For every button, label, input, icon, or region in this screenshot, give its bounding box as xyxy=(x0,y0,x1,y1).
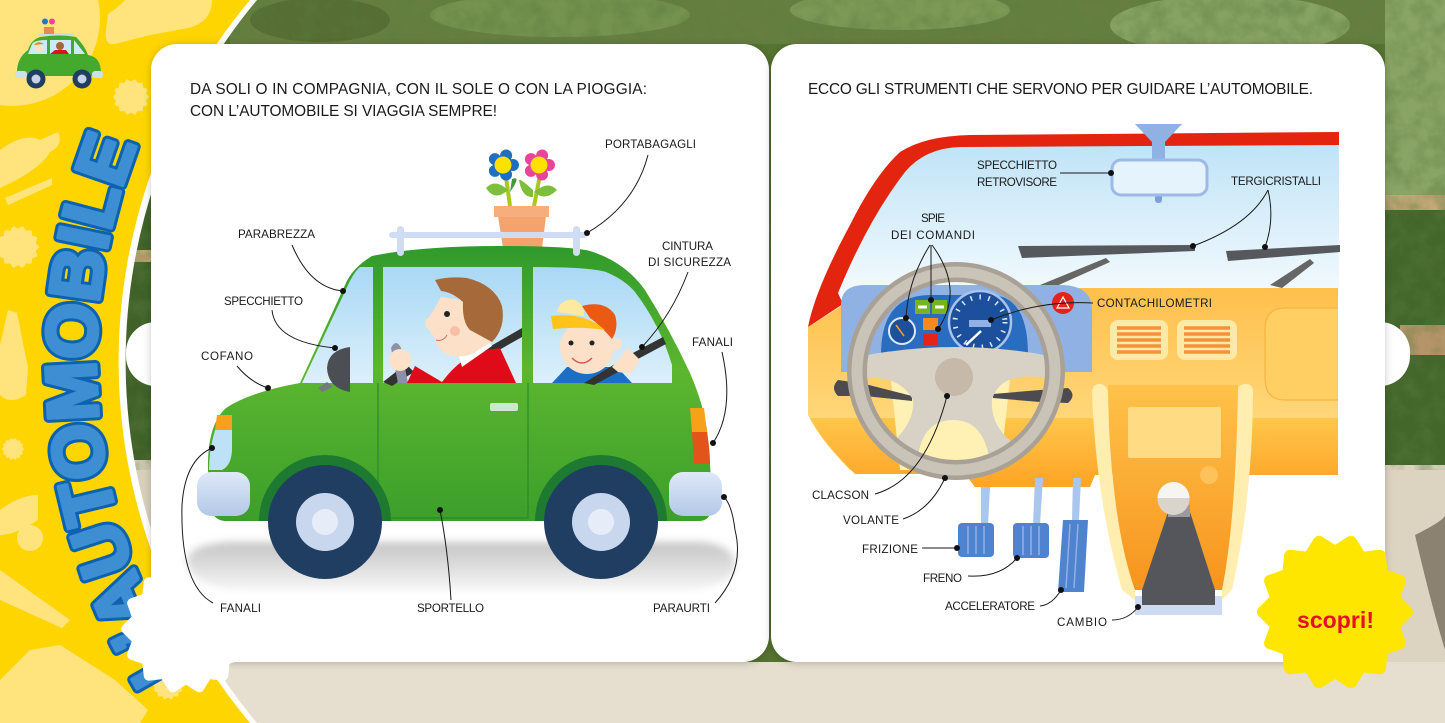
labels: left page: PARABREZZA xyxy=(238,228,315,241)
gear lever xyxy=(1142,482,1215,605)
yellow badge: scopri!: scopri! xyxy=(1297,607,1374,633)
door lines xyxy=(378,383,528,518)
red frame xyxy=(808,132,1339,327)
labels: right page: RETROVISORE xyxy=(977,176,1057,189)
labels: left page: SPECCHIETTO xyxy=(224,295,303,308)
center console xyxy=(1092,384,1253,615)
windshield xyxy=(302,267,373,383)
driver xyxy=(383,277,522,386)
yellow side band xyxy=(0,0,257,723)
glove box xyxy=(1265,308,1338,400)
middle window xyxy=(383,267,522,383)
title: L'AUTOMOBILE: L’AUTOMOBILE xyxy=(41,126,162,694)
heading: left page: CON L’AUTOMOBILE SI VIAGGIA SEMPRE! xyxy=(190,103,497,120)
labels: right page: DEI COMANDI xyxy=(891,229,975,242)
heading: left page: DA SOLI O IN COMPAGNIA, CON IL SOLE O CON LA PIOGGIA: xyxy=(190,81,647,98)
rear view mirror xyxy=(1112,124,1207,203)
warning lights xyxy=(915,300,947,345)
stalks xyxy=(834,380,1072,403)
tab: left xyxy=(126,322,186,386)
door handle xyxy=(490,403,518,411)
rear window xyxy=(533,267,672,383)
labels: left page: FANALI xyxy=(220,602,261,615)
windshield glass xyxy=(835,143,1339,300)
decorative pale silhouettes xyxy=(0,0,212,723)
labels: left page: DI SICUREZZA xyxy=(648,256,731,269)
labels: left page: COFANO xyxy=(201,350,253,363)
labels: left page: PORTABAGAGLI xyxy=(605,138,696,151)
panel: left page xyxy=(126,44,769,687)
car body xyxy=(208,246,711,521)
air vents xyxy=(1110,320,1237,360)
hazard button xyxy=(1052,292,1074,314)
labels: right page: VOLANTE xyxy=(843,514,899,527)
roof rack xyxy=(389,226,587,256)
tab: right xyxy=(1350,322,1410,386)
wipers xyxy=(1018,245,1340,288)
speedometer xyxy=(949,291,1011,353)
fuel gauge xyxy=(889,318,915,344)
labels: right page: FRIZIONE xyxy=(862,543,918,556)
steering column xyxy=(891,380,1010,470)
title: L'AUTOMOBILE: L’AUTOMOBILE xyxy=(44,130,157,691)
ground shadow xyxy=(187,542,735,590)
heading: right page: ECCO GLI STRUMENTI CHE SERVONO PER GUIDARE L’AUTOMOBILE. xyxy=(808,81,1313,98)
white starburst xyxy=(126,571,246,687)
heading: left page xyxy=(190,81,647,120)
labels: right page: CONTACHILOMETRI xyxy=(1097,297,1212,310)
instrument cluster xyxy=(841,285,1092,372)
car illustration xyxy=(187,155,735,590)
callout dots: right page xyxy=(903,170,1268,610)
labels: right page: TERGICRISTALLI xyxy=(1231,175,1321,188)
bumpers xyxy=(197,472,250,516)
labels: right page: ACCELERATORE xyxy=(945,600,1035,613)
pedals xyxy=(958,478,1088,592)
panel: right page xyxy=(771,44,1385,662)
callouts: left page xyxy=(182,155,737,603)
labels: right page: FRENO xyxy=(923,572,962,585)
labels: right page xyxy=(812,159,1321,629)
steering wheel xyxy=(857,272,1055,470)
labels: left page xyxy=(201,138,733,615)
labels: right page: CAMBIO xyxy=(1057,616,1107,629)
dashboard body xyxy=(808,288,1338,475)
front light xyxy=(209,415,232,470)
labels: left page: SPORTELLO xyxy=(417,602,484,615)
yellow badge: scopri! xyxy=(1263,542,1407,682)
callouts: right page xyxy=(875,173,1271,620)
labels: right page: SPECCHIETTO xyxy=(977,159,1057,172)
child xyxy=(551,300,666,385)
labels: right page: CLACSON xyxy=(812,489,869,502)
rear light xyxy=(690,408,710,464)
labels: left page: PARAURTI xyxy=(653,602,710,615)
icon: small car xyxy=(15,18,103,88)
dashboard illustration xyxy=(808,124,1340,615)
labels: left page: CINTURA xyxy=(662,240,713,253)
wheel arches and wheels xyxy=(259,455,667,579)
wing mirror xyxy=(327,347,350,392)
labels: right page: SPIE xyxy=(921,212,945,225)
callout dots: left page xyxy=(209,230,727,513)
flower pot xyxy=(486,155,557,248)
labels: left page: FANALI xyxy=(692,336,733,349)
